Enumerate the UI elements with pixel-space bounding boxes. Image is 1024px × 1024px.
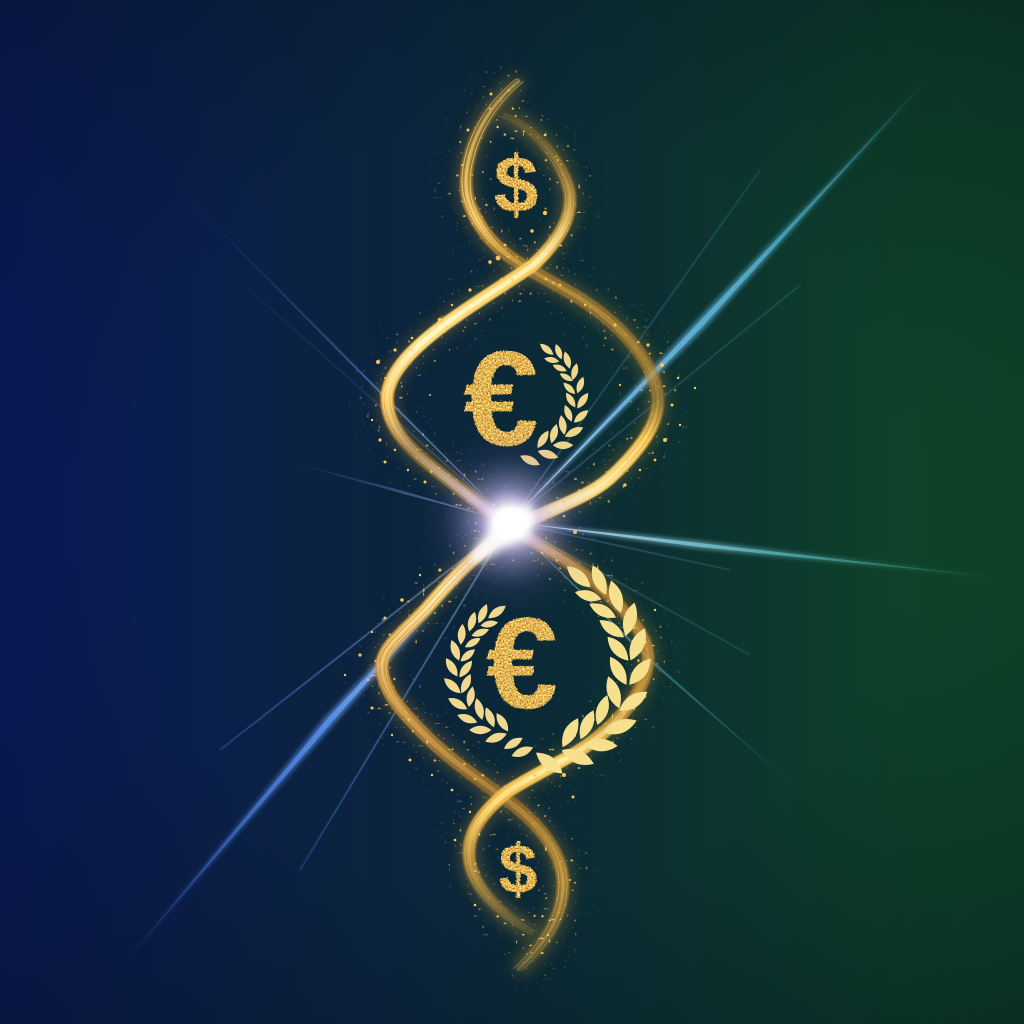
upper euro symbol: € [463, 323, 539, 474]
lower left laurel wreath [441, 602, 535, 760]
light rays [110, 60, 1020, 980]
bottom dollar symbol: $ [499, 830, 537, 908]
central starburst flare [415, 427, 605, 617]
helix glow [382, 80, 658, 970]
strand B [383, 114, 652, 934]
double helix [378, 79, 662, 971]
large right laurel wreath [532, 562, 656, 778]
lower euro symbol: € [486, 590, 558, 736]
gold sparkles [344, 92, 696, 936]
gold glitter dust [382, 80, 658, 970]
strand A [378, 79, 662, 971]
top dollar symbol: $ [494, 140, 538, 229]
upper laurel wreath [519, 341, 591, 469]
